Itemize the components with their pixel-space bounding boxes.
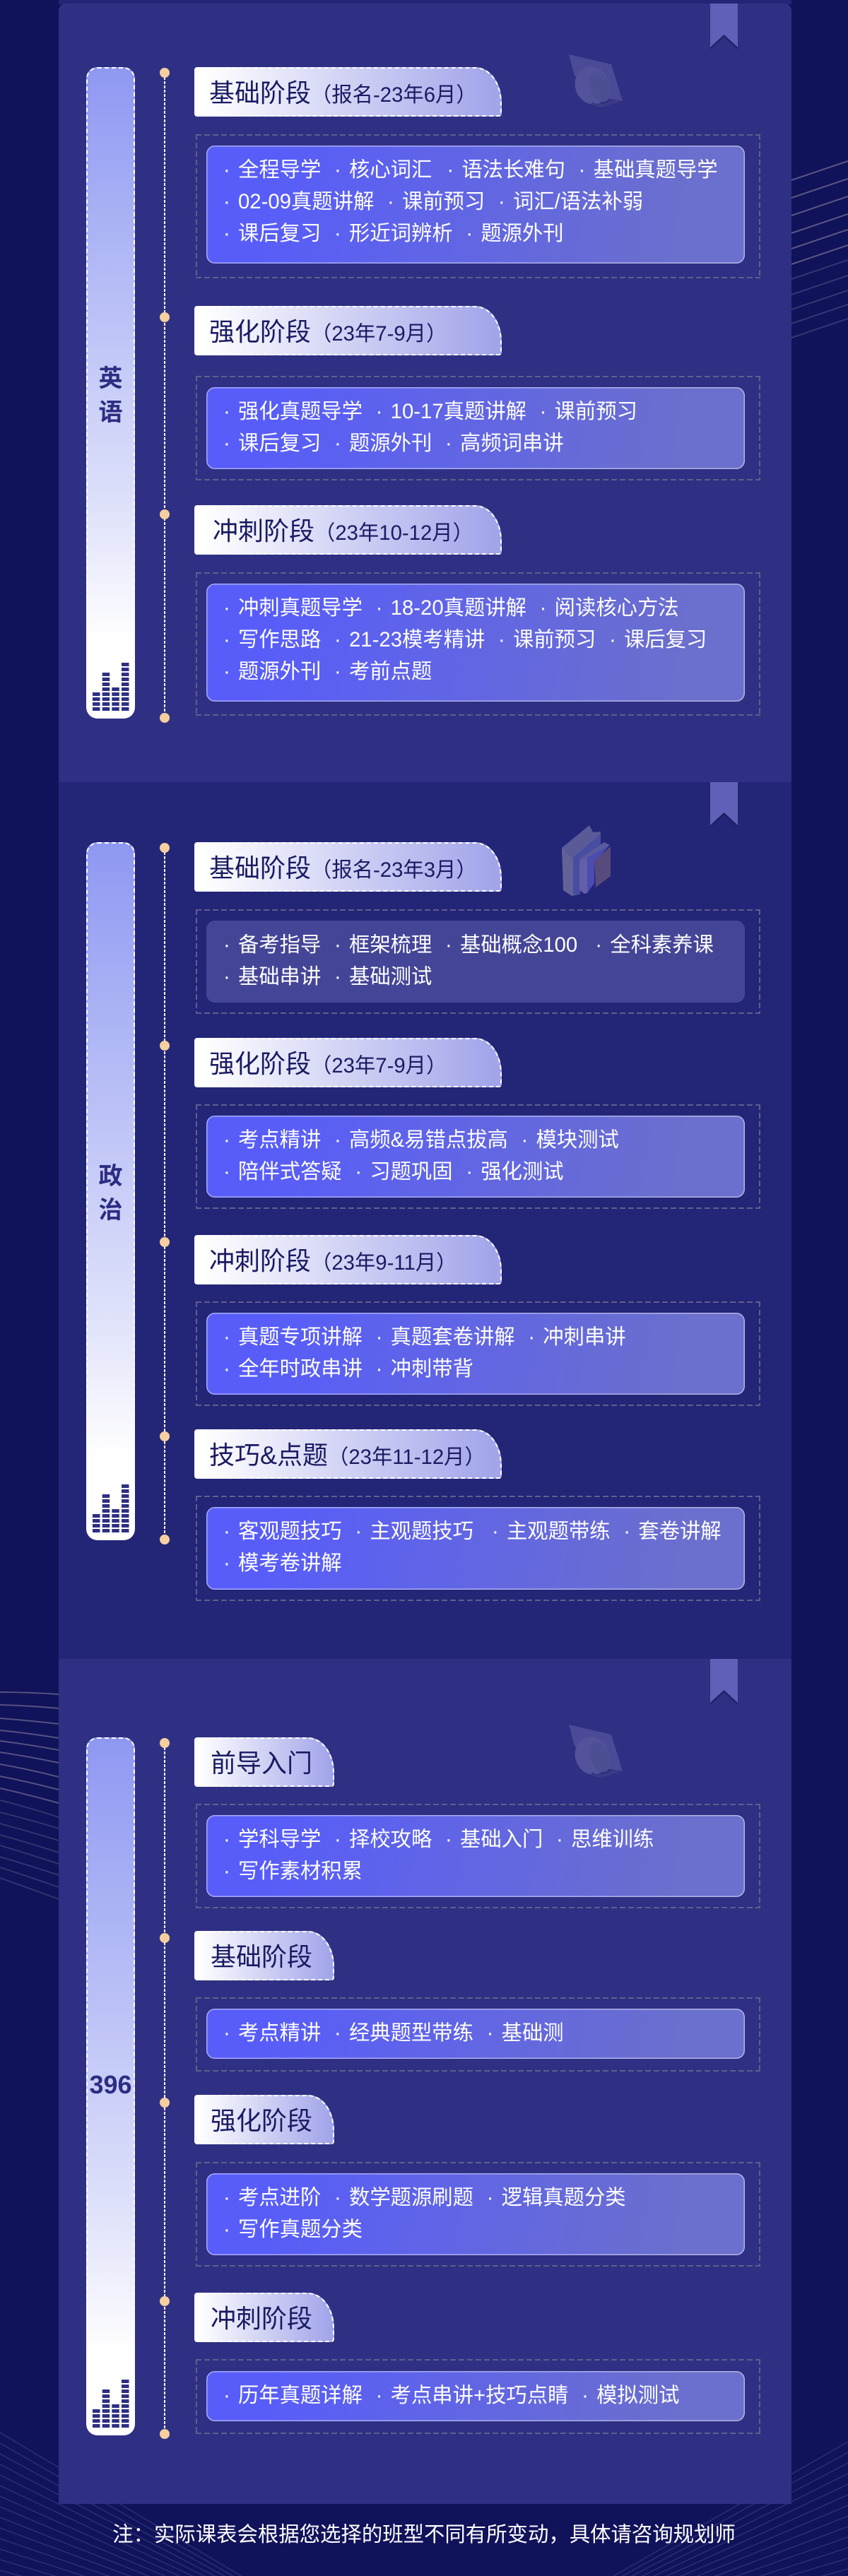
content box: 冲刺阶段: 冲刺真题导学: [238, 596, 363, 620]
stage heading: 基础阶段: 基础阶段（报名-23年6月）: [209, 78, 477, 107]
stage heading: 冲刺阶段: [194, 2293, 334, 2342]
content box: 强化阶段: 10-17真题讲解: [391, 400, 526, 423]
subject pill: 396: [86, 1737, 135, 2435]
content box: 冲刺阶段: [196, 1301, 760, 1406]
content box: 基础阶段: ·: [466, 222, 473, 245]
content box: 强化阶段: ·: [223, 2218, 230, 2241]
stage heading: 基础阶段: [194, 67, 502, 117]
icon: equalizer bars: [93, 663, 129, 711]
content box: 前导入门: ·: [223, 1828, 230, 1851]
content box: 强化阶段: 模块测试: [536, 1128, 619, 1152]
content box: 冲刺阶段: 冲刺串讲: [543, 1325, 626, 1349]
content box: 冲刺阶段: ·: [528, 1325, 535, 1349]
content box: 基础阶段: 考点精讲: [238, 2021, 321, 2045]
timeline dot: [160, 1431, 170, 1441]
content box: 冲刺阶段: 题源外刊: [238, 660, 321, 683]
content box: 技巧&点题: ·: [492, 1520, 499, 1543]
stage heading: 技巧&点题: [194, 1429, 502, 1479]
content box: 基础阶段: 02-09真题讲解: [238, 190, 374, 213]
content box: 前导入门: ·: [556, 1828, 563, 1851]
content box: 基础阶段: [196, 909, 760, 1014]
content box: 冲刺阶段: ·: [376, 596, 382, 620]
icon: bookmark: [710, 1659, 738, 1704]
subject pill: 政治: [86, 842, 135, 1540]
content box: 基础阶段: ·: [387, 190, 394, 213]
stage heading: 强化阶段: 强化阶段: [211, 2106, 312, 2135]
content box: 强化阶段: 强化测试: [481, 1160, 564, 1183]
content box: 前导入门: [196, 1804, 760, 1908]
content box: 技巧&点题: ·: [355, 1520, 362, 1543]
content box: 冲刺阶段: 冲刺带背: [391, 1357, 473, 1381]
stage heading: 强化阶段: [194, 2095, 334, 2144]
content box: 冲刺阶段: 历年真题详解: [238, 2384, 363, 2407]
content box: 基础阶段: [196, 134, 760, 278]
content box: 冲刺阶段: 真题套卷讲解: [391, 1325, 515, 1349]
content box: 基础阶段: ·: [223, 933, 230, 957]
content box: 强化阶段: 陪伴式答疑: [238, 1160, 342, 1183]
panel: 396: [59, 1659, 791, 2504]
content box: 基础阶段: ·: [498, 190, 505, 213]
content box: 基础阶段: ·: [595, 933, 602, 957]
content box: 基础阶段: 课前预习: [402, 190, 485, 213]
stage heading: 冲刺阶段: 冲刺阶段: [211, 2304, 312, 2333]
content box: 强化阶段: [196, 376, 760, 480]
content box: 强化阶段: ·: [466, 1160, 473, 1183]
content box: 冲刺阶段: 考前点题: [349, 660, 432, 683]
content box: 冲刺阶段: 阅读核心方法: [555, 596, 679, 620]
content box: 冲刺阶段: ·: [376, 1357, 382, 1381]
content box: 强化阶段: ·: [445, 432, 452, 455]
timeline dot: [160, 1535, 170, 1544]
content box: 技巧&点题: 套卷讲解: [638, 1520, 722, 1543]
content box: 冲刺阶段: ·: [223, 596, 230, 620]
timeline dot: [160, 843, 170, 853]
content box: 强化阶段: 高频&易错点拔高: [349, 1128, 508, 1152]
content box: 冲刺阶段: ·: [223, 660, 230, 683]
label: 英语: 英: [99, 365, 123, 392]
content box: 冲刺阶段: 写作思路: [238, 628, 321, 651]
content box: 强化阶段: ·: [376, 400, 382, 423]
content box: 基础阶段: ·: [334, 965, 341, 988]
content box: 强化阶段: [196, 1104, 760, 1209]
content box: 基础阶段: ·: [487, 2021, 493, 2045]
content box: 基础阶段: ·: [334, 933, 341, 957]
stage heading: 强化阶段: [194, 1038, 502, 1087]
stage heading: 技巧&点题: 技巧&点题（23年11-12月）: [209, 1441, 485, 1470]
timeline dot: [160, 509, 170, 519]
stage heading: 基础阶段: 基础阶段: [211, 1942, 312, 1971]
content box: 强化阶段: ·: [223, 1128, 230, 1152]
content box: 强化阶段: 高频词串讲: [460, 432, 564, 455]
content box: 基础阶段: ·: [223, 158, 230, 182]
icon: stack of books: [562, 825, 611, 896]
content box: 冲刺阶段: 18-20真题讲解: [391, 596, 526, 620]
content box: 基础阶段: ·: [579, 158, 585, 182]
subject pill: 英语: [86, 67, 135, 719]
label: 英语: 语: [99, 399, 123, 426]
content box: 技巧&点题: 模考卷讲解: [238, 1552, 342, 1575]
timeline dot: [160, 2429, 170, 2439]
stage heading: 强化阶段: 强化阶段（23年7-9月）: [209, 1049, 447, 1078]
content box: 前导入门: 学科导学: [238, 1828, 321, 1851]
timeline dot: [160, 312, 170, 322]
timeline dot: [160, 1041, 170, 1051]
content box: 冲刺阶段: ·: [498, 628, 505, 651]
timeline dot: [160, 68, 170, 78]
content box: 技巧&点题: [196, 1496, 760, 1601]
content box: 基础阶段: ·: [334, 2021, 341, 2045]
stage heading: 前导入门: [194, 1737, 334, 1787]
label: 政治: 政: [99, 1163, 123, 1190]
content box: 强化阶段: 考点进阶: [238, 2186, 321, 2209]
content box: 基础阶段: 基础串讲: [238, 965, 321, 988]
top strip: [59, 0, 791, 4]
content box: 强化阶段: 课后复习: [238, 432, 321, 455]
content box: 冲刺阶段: 课后复习: [624, 628, 707, 651]
content box: 强化阶段: 习题巩固: [370, 1160, 453, 1183]
stage heading: 前导入门: 前导入门: [211, 1749, 312, 1778]
content box: 前导入门: 基础入门: [460, 1828, 543, 1851]
icon: graduation cap: [569, 54, 623, 107]
content box: 基础阶段: ·: [223, 222, 230, 245]
content box: 强化阶段: 课前预习: [555, 400, 637, 423]
content box: 技巧&点题: ·: [223, 1552, 230, 1575]
stage heading: 冲刺阶段: [194, 505, 502, 555]
stage heading: 强化阶段: 强化阶段（23年7-9月）: [209, 317, 447, 346]
stage heading: 冲刺阶段: [194, 1235, 502, 1284]
content box: 前导入门: ·: [445, 1828, 452, 1851]
content box: 基础阶段: ·: [445, 933, 452, 957]
content box: 前导入门: 思维训练: [571, 1828, 654, 1851]
content box: 基础阶段: 基础真题导学: [594, 158, 718, 182]
content box: 冲刺阶段: 真题专项讲解: [238, 1325, 363, 1349]
content box: 强化阶段: 题源外刊: [349, 432, 432, 455]
content box: 强化阶段: ·: [223, 432, 230, 455]
panel: 政治: [59, 782, 791, 1659]
content box: 技巧&点题: 主观题带练: [507, 1520, 611, 1543]
content box: 基础阶段: [196, 1997, 760, 2072]
content box: 强化阶段: [196, 2162, 760, 2267]
content box: 强化阶段: ·: [540, 400, 546, 423]
content box: 前导入门: ·: [223, 1860, 230, 1883]
icon: equalizer bars: [93, 1484, 129, 1532]
timeline dot: [160, 1738, 170, 1748]
content box: 强化阶段: ·: [223, 2186, 230, 2209]
content box: 基础阶段: 全科素养课: [610, 933, 714, 957]
content box: 基础阶段: 基础测: [502, 2021, 564, 2045]
content box: 基础阶段: ·: [223, 2021, 230, 2045]
timeline: [164, 1743, 165, 2434]
label: 英语: [99, 365, 123, 426]
content box: 基础阶段: ·: [334, 222, 341, 245]
icon: graduation cap: [569, 1725, 623, 1777]
content box: 前导入门: ·: [334, 1828, 341, 1851]
content box: 冲刺阶段: ·: [376, 2384, 382, 2407]
content box: 强化阶段: ·: [223, 400, 230, 423]
content box: 冲刺阶段: [196, 572, 760, 716]
timeline dot: [160, 1237, 170, 1247]
content box: 冲刺阶段: ·: [334, 660, 341, 683]
content box: 技巧&点题: ·: [223, 1520, 230, 1543]
label: 政治: [99, 1163, 123, 1224]
content box: 基础阶段: ·: [334, 158, 341, 182]
content box: 冲刺阶段: ·: [334, 628, 341, 651]
timeline dot: [160, 2098, 170, 2108]
content box: 冲刺阶段: ·: [582, 2384, 589, 2407]
content box: 强化阶段: 逻辑真题分类: [502, 2186, 626, 2209]
content box: 基础阶段: 全程导学: [238, 158, 321, 182]
content box: 基础阶段: 经典题型带练: [349, 2021, 473, 2045]
content box: 强化阶段: 数学题源刷题: [349, 2186, 473, 2209]
content box: 冲刺阶段: 模拟测试: [596, 2384, 679, 2407]
content box: 冲刺阶段: ·: [609, 628, 616, 651]
label: 396: 396: [89, 2070, 132, 2099]
content box: 基础阶段: 基础测试: [349, 965, 432, 988]
content box: 冲刺阶段: 课前预习: [513, 628, 596, 651]
stage heading: 冲刺阶段: 冲刺阶段（23年10-12月）: [213, 516, 473, 545]
icon: equalizer bars: [93, 2380, 129, 2428]
content box: 强化阶段: ·: [334, 2186, 341, 2209]
content box: 基础阶段: 课后复习: [238, 222, 321, 245]
content box: 冲刺阶段: ·: [223, 1325, 230, 1349]
content box: 基础阶段: 词汇/语法补弱: [513, 190, 643, 213]
stage heading: 强化阶段: [194, 306, 502, 355]
content box: 基础阶段: 框架梳理: [349, 933, 432, 957]
content box: 基础阶段: 形近词辨析: [349, 222, 453, 245]
stage heading: 基础阶段: [194, 1931, 334, 1980]
content box: 基础阶段: 备考指导: [238, 933, 321, 957]
content box: 强化阶段: ·: [223, 1160, 230, 1183]
content box: 技巧&点题: 客观题技巧: [238, 1520, 342, 1543]
icon: bookmark: [710, 4, 738, 49]
stage heading: 基础阶段: 基础阶段（报名-23年3月）: [209, 853, 477, 882]
stage heading: 基础阶段: [194, 842, 502, 892]
content box: 强化阶段: ·: [355, 1160, 362, 1183]
content box: 冲刺阶段: ·: [540, 596, 546, 620]
stage heading: 冲刺阶段: 冲刺阶段（23年9-11月）: [209, 1246, 457, 1275]
content box: 冲刺阶段: 全年时政串讲: [238, 1357, 363, 1381]
timeline dot: [160, 1933, 170, 1943]
content box: 冲刺阶段: ·: [223, 2384, 230, 2407]
content box: 冲刺阶段: 21-23模考精讲: [349, 628, 485, 651]
content box: 前导入门: 写作素材积累: [238, 1860, 363, 1883]
content box: 基础阶段: ·: [223, 965, 230, 988]
timeline: [164, 73, 165, 718]
timeline: [164, 848, 165, 1540]
timeline dot: [160, 2296, 170, 2306]
content box: 强化阶段: 考点精讲: [238, 1128, 321, 1152]
content box: 基础阶段: 题源外刊: [481, 222, 564, 245]
label: 政治: 治: [99, 1197, 123, 1224]
icon: bookmark: [710, 782, 738, 827]
panel: 英语: [59, 4, 791, 782]
content box: 基础阶段: ·: [447, 158, 454, 182]
content box: 冲刺阶段: [196, 2359, 760, 2434]
content box: 强化阶段: 写作真题分类: [238, 2218, 363, 2241]
content box: 技巧&点题: ·: [623, 1520, 630, 1543]
content box: 强化阶段: ·: [334, 1128, 341, 1152]
content box: 基础阶段: 语法长难句: [461, 158, 565, 182]
content box: 强化阶段: 强化真题导学: [238, 400, 363, 423]
footnote: 注：实际课表会根据您选择的班型不同有所变动，具体请咨询规划师: [112, 2523, 736, 2546]
timeline dot: [160, 713, 170, 723]
content box: 冲刺阶段: ·: [376, 1325, 382, 1349]
content box: 冲刺阶段: ·: [223, 628, 230, 651]
content box: 冲刺阶段: 考点串讲+技巧点睛: [391, 2384, 568, 2407]
content box: 前导入门: 择校攻略: [349, 1828, 432, 1851]
content box: 强化阶段: ·: [522, 1128, 528, 1152]
content box: 强化阶段: ·: [334, 432, 341, 455]
content box: 冲刺阶段: ·: [223, 1357, 230, 1381]
content box: 基础阶段: ·: [223, 190, 230, 213]
content box: 技巧&点题: 主观题技巧: [370, 1520, 473, 1543]
content box: 基础阶段: 基础概念100: [460, 933, 577, 957]
content box: 强化阶段: ·: [487, 2186, 493, 2209]
content box: 基础阶段: 核心词汇: [349, 158, 432, 182]
